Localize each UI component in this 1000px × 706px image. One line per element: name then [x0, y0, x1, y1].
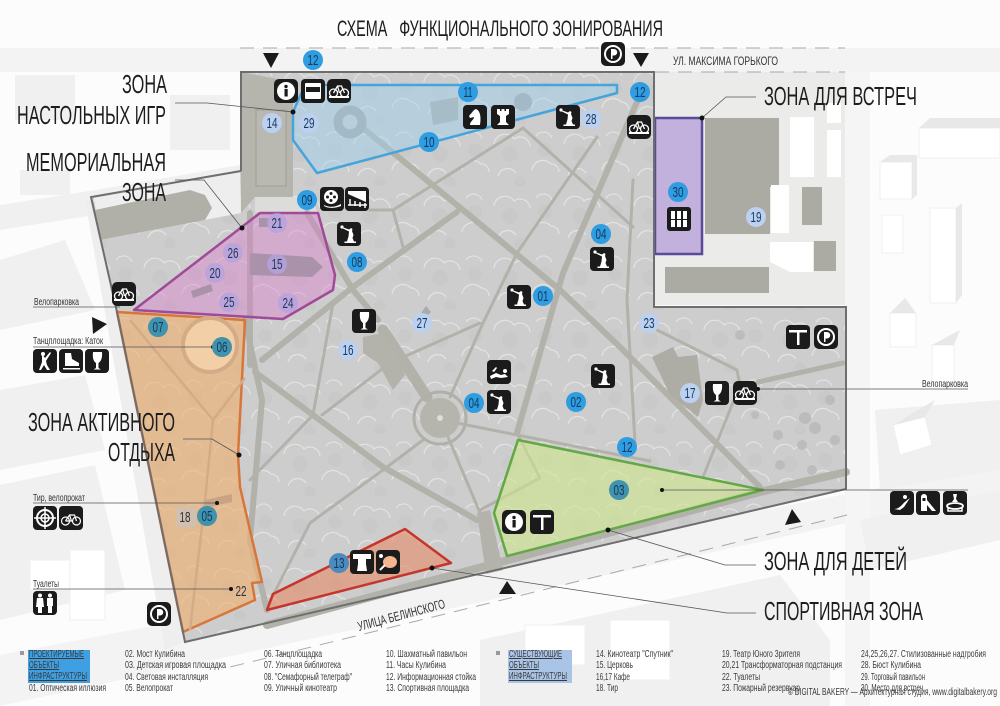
badges: new objects: 12	[308, 52, 318, 69]
icon: statue 08	[337, 222, 361, 246]
small label: bike parking west: Велопарковка	[34, 297, 79, 308]
legend column: 14-18: 14. Кинотеатр "Спутник"	[596, 649, 673, 660]
badges: new objects: 06	[216, 339, 228, 356]
badges: existing objects: 28	[586, 111, 596, 128]
legend column: 02-05: 03. Детская игровая площадка	[125, 660, 226, 671]
icon: info children	[502, 510, 526, 534]
badges: existing objects: 20	[210, 265, 220, 282]
heading: memorial zone: ЗОНА	[122, 177, 166, 207]
legend: new infrastructure: ИНФРАСТРУКТУРЫ	[29, 671, 87, 682]
zone: sport (red)	[267, 529, 451, 610]
small label: shooting range: Тир, велопрокат	[33, 493, 85, 504]
badges: existing objects: 16	[342, 342, 354, 359]
badges: new objects: 01	[538, 288, 548, 305]
zone: meetings (violet)	[655, 118, 702, 254]
badges: new objects: 04	[596, 226, 606, 243]
legend column: 10-13: 13. Спортивная площадка	[386, 683, 469, 694]
badges: new objects: 02	[570, 394, 582, 411]
small label: bike parking east: Велопарковка	[922, 379, 968, 390]
dashed street edges	[226, 48, 847, 668]
icon: skate	[59, 349, 83, 373]
legend column: 10-13: 12. Информационная стойка	[386, 671, 476, 683]
heading: active recreation zone: ОТДЫХА	[108, 437, 175, 467]
badges: new objects: 08	[352, 254, 362, 271]
legend column: 02-05: 04. Световая инсталляция	[125, 672, 208, 683]
badges: new objects: 07	[152, 319, 164, 336]
icon: dancer	[33, 349, 57, 373]
badges: new objects: 12	[622, 439, 632, 456]
legend column: 14-18	[596, 649, 673, 694]
legend column: 10-13: 11. Часы Кулибина	[386, 659, 446, 671]
legend column: 14-18: 18. Тир	[596, 683, 618, 694]
legend: existing infrastructure	[496, 649, 572, 683]
icon: table tennis	[376, 550, 400, 574]
legend: new infrastructure	[20, 649, 106, 694]
gray building near memorial	[95, 190, 212, 240]
legend: existing infrastructure: ИНФРАСТРУКТУРЫ	[509, 671, 567, 682]
icon: bicycle rental	[59, 506, 83, 530]
icon: vase west	[85, 349, 109, 373]
legend column: 02-05	[125, 648, 226, 694]
icon: crowd	[667, 207, 691, 231]
entrance arrows	[92, 53, 801, 594]
zone: memorial (purple)	[134, 213, 335, 319]
icon: bike parking east	[733, 381, 757, 405]
legend: new infrastructure: 01. Оптическая иллюзия	[29, 683, 106, 694]
badges: existing objects: 27	[416, 315, 428, 332]
icon: vase 17	[705, 381, 729, 405]
badges: existing objects: 22	[236, 583, 246, 600]
icon: lying figure	[487, 360, 511, 384]
heading: table games zone	[17, 69, 167, 130]
legend column: 19-23: 20,21 Трансформаторная подстанция	[722, 659, 842, 671]
street label: Maxim Gorky: УЛ. МАКСИМА ГОРЬКОГО	[673, 54, 778, 68]
badges: new objects: 04	[468, 395, 480, 412]
icon: parking top	[601, 42, 625, 66]
legend column: 19-23: 22. Туалеты	[722, 672, 760, 683]
badges: existing objects: 18	[180, 509, 190, 526]
title: СХЕМА ФУНКЦИОНАЛЬНОГО ЗОНИРОВАНИЯ	[337, 16, 663, 41]
legend column: 24-30: 28. Бюст Кулибина	[861, 659, 921, 671]
park area with tree canopy	[91, 72, 846, 642]
small label: dance floor and rink: Танцплощадка: Каток	[33, 336, 103, 347]
icon: bike parking west	[112, 282, 136, 306]
icon: vase 16	[352, 309, 376, 333]
icon: pavilion	[301, 79, 325, 103]
badges: new objects: 10	[424, 134, 434, 151]
park road network	[241, 72, 846, 625]
icon: statue 04 south	[487, 390, 511, 414]
heading: active recreation zone: ЗОНА АКТИВНОГО	[28, 407, 175, 437]
zone: children (green)	[494, 440, 763, 556]
icon: statue 28	[556, 105, 580, 129]
icon: target	[33, 506, 57, 530]
darker trees on the east side	[735, 330, 840, 475]
icon: sign east	[786, 325, 810, 349]
icon: knight	[463, 105, 487, 129]
legend column: 06-09: 09. Уличный кинотеатр	[264, 683, 337, 694]
badges: existing objects: 21	[272, 215, 282, 232]
badges: existing objects: 26	[228, 245, 238, 262]
badges: new objects: 11	[464, 84, 472, 101]
icon: weights	[350, 550, 374, 574]
icon: railway signal	[345, 187, 369, 211]
legend column: 19-23: 19. Театр Юного Зрителя	[722, 649, 800, 660]
badges: existing objects: 19	[750, 209, 762, 226]
legend: new infrastructure: ПРОЕКТИРУЕМЫЕ	[29, 649, 84, 660]
street label: Belinsky: УЛИЦА БЕЛИНСКОГО	[356, 596, 447, 634]
badges: existing objects: 24	[282, 295, 294, 312]
badges: new objects: 05	[202, 508, 212, 525]
heading: memorial zone	[26, 147, 166, 207]
legend column: 19-23	[722, 649, 842, 694]
legend: new infrastructure: ОБЪЕКТЫ	[29, 660, 59, 671]
badges: existing objects: 29	[304, 115, 314, 132]
zone: table games (blue)	[293, 85, 617, 173]
icon: statue 01	[507, 285, 531, 309]
heading: children zone: ЗОНА ДЛЯ ДЕТЕЙ	[764, 546, 907, 576]
legend column: 02-05: 02. Мост Кулибина	[125, 648, 185, 660]
icon: statue 04 north	[590, 247, 614, 271]
heading: active recreation zone	[28, 407, 175, 467]
legend column: 24-30: 29. Торговый павильон	[861, 672, 925, 683]
badges: existing objects: 14	[266, 115, 278, 132]
legend column: 10-13	[386, 649, 476, 694]
icon: parking south-west	[147, 602, 171, 626]
icon: bike parking north	[327, 79, 351, 103]
heading: table games zone: НАСТОЛЬНЫХ ИГР	[17, 100, 166, 130]
theatre block buildings	[665, 103, 841, 293]
legend: existing infrastructure: СУЩЕСТВУЮЩИЕ	[509, 649, 562, 660]
legend column: 06-09: 08. "Семафорный телеграф"	[264, 671, 352, 683]
icon: playground	[916, 491, 940, 515]
badges: new objects: 30	[672, 184, 684, 201]
icon: slide figure	[890, 491, 914, 515]
site boundary	[91, 72, 846, 642]
icon: rook	[491, 105, 515, 129]
icon: trampoline	[943, 491, 967, 515]
badges: new objects	[148, 50, 688, 573]
badges: existing objects: 23	[644, 315, 654, 332]
heading: table games zone: ЗОНА	[122, 69, 167, 99]
legend column: 06-09	[264, 649, 352, 694]
badges: new objects: 09	[302, 192, 312, 209]
badges: new objects: 13	[334, 555, 344, 572]
badges: new objects: 03	[614, 482, 624, 499]
legend column: 14-18: 15. Церковь	[596, 660, 633, 671]
legend column: 14-18: 16,17 Кафе	[596, 671, 630, 683]
heading: memorial zone: МЕМОРИАЛЬНАЯ	[26, 147, 166, 177]
icon: film	[320, 187, 344, 211]
icon: toilets	[33, 591, 57, 615]
zone: active recreation (orange)	[117, 312, 262, 632]
heading: meetings zone: ЗОНА ДЛЯ ВСТРЕЧ	[764, 81, 917, 111]
legend column: 06-09: 07. Уличная библиотека	[264, 659, 341, 671]
icon: info north	[274, 79, 298, 103]
plazas and buildings in the park	[338, 93, 703, 574]
icon: parking east	[814, 325, 838, 349]
legend column: 02-05: 05. Велопрокат	[125, 683, 173, 694]
legend column: 24-30	[861, 648, 986, 694]
legend column: 24-30: 30. Место для встреч	[861, 683, 923, 694]
badges: new objects: 12	[634, 84, 646, 101]
icon: bike parking north-east	[627, 115, 651, 139]
legend: existing infrastructure: ОБЪЕКТЫ	[509, 660, 539, 671]
icon: statue 02	[591, 364, 615, 388]
badges: existing objects	[180, 109, 766, 600]
badges: existing objects: 17	[684, 385, 696, 402]
small label: toilets: Туалеты	[33, 579, 59, 590]
legend column: 06-09: 06. Танцплощадка	[264, 649, 322, 660]
leader lines	[33, 97, 968, 613]
legend column: 19-23: 23. Пожарный резервуар	[722, 683, 800, 694]
legend column: 10-13: 10. Шахматный павильон	[386, 649, 467, 660]
badges: existing objects: 15	[272, 256, 282, 273]
badges: existing objects: 25	[224, 294, 234, 311]
icon: sign children	[530, 510, 554, 534]
